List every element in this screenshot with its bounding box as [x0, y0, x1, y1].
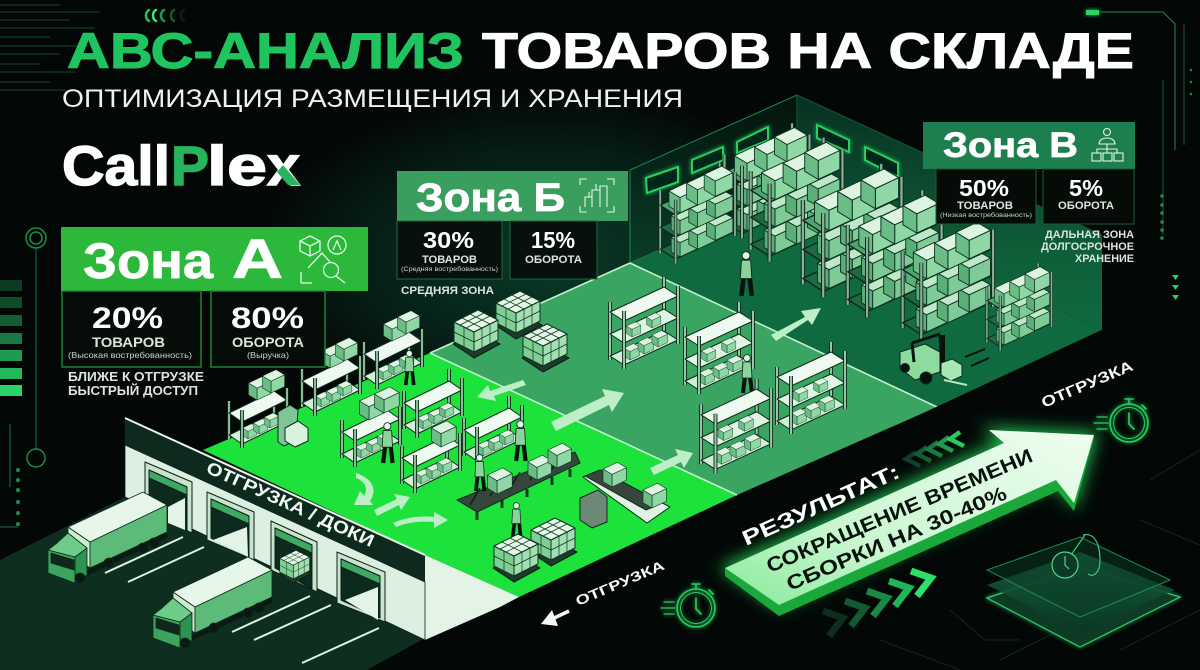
header text: Зона В: [943, 126, 1078, 165]
label: shipping left: [541, 558, 667, 626]
warehouse: building shell and floor: [0, 95, 1102, 670]
icon: zone B chart: [580, 179, 614, 212]
sign: docks: ОТГРУЗКА / ДОКИ: [203, 457, 377, 551]
panel: zone A: [61, 227, 368, 398]
logo: CallPlex: [62, 134, 300, 197]
header: [923, 122, 1135, 169]
floor: front strip: [425, 555, 519, 640]
ground: docks apron: [0, 497, 425, 670]
result line 1: СОКРАЩЕНИЕ ВРЕМЕНИ: [763, 445, 1036, 578]
chevrons: lower: [823, 571, 931, 636]
truck 2: [153, 557, 272, 648]
icon: top scan marks: [146, 10, 184, 21]
cell: 30% goods: 30%: [423, 227, 474, 253]
title: accent: АВС-АНАЛИЗ: [67, 23, 464, 79]
arrow edge: [725, 437, 1094, 616]
cell: 5% turnover: ОБОРОТА: [1058, 200, 1114, 212]
arrow body: [725, 430, 1094, 605]
cell: 80% turnover: 80%: [231, 302, 304, 335]
conveyor 2 with scanner: [580, 462, 670, 528]
note: ДАЛЬНАЯ ЗОНА: [1045, 229, 1134, 241]
racks: zone A: [229, 311, 526, 493]
logo: CallPlex: Call: [62, 134, 170, 197]
panel: zone B: [397, 171, 628, 297]
cell: 80% turnover: [211, 291, 325, 367]
note: ХРАНЕНИЕ: [1075, 253, 1134, 265]
cell: 30% goods: ТОВАРОВ: [422, 254, 477, 266]
forklift: [900, 334, 989, 385]
wall: back left: [630, 95, 797, 263]
arrow: to zone V: [771, 308, 821, 341]
arrow glow: [725, 430, 1094, 605]
worker at conveyor: [475, 455, 484, 491]
machine: picking terminal: [278, 405, 308, 447]
wall: back right: [797, 95, 1102, 330]
cell: 50% goods: ТОВАРОВ: [957, 200, 1013, 212]
windows: glowing: [646, 125, 898, 193]
note: ДОЛГОСРОЧНОЕ: [1041, 241, 1134, 253]
cell: 50% goods: (Низкая востребованность): [940, 211, 1032, 219]
floor: zone B: [430, 263, 937, 495]
dock door 3: [271, 521, 317, 592]
icon: zone V hierarchy: [1092, 128, 1123, 161]
header text: Зона Б: [416, 176, 565, 220]
cell: 5% turnover: 5%: [1069, 175, 1103, 201]
cell: 20% goods: 20%: [92, 302, 163, 335]
logo: CallPlex: le: [207, 134, 267, 197]
panel: zone V: [923, 122, 1135, 265]
cell: 80% turnover: ОБОРОТА: [232, 334, 304, 350]
truck 1: [48, 492, 167, 583]
logo: CallPlex: x: [267, 134, 300, 197]
dock door 4: [337, 552, 385, 622]
note: [68, 369, 204, 398]
sign band: [125, 418, 425, 582]
cell: 15% turnover: 15%: [531, 227, 575, 253]
note: БЛИЖЕ К ОТГРУЗКЕ: [68, 369, 204, 384]
icon: zone A analysis: [300, 236, 346, 283]
note: [1041, 229, 1134, 265]
cell: 5% turnover: [1043, 169, 1134, 224]
cell: 50% goods: [936, 169, 1036, 224]
logo: CallPlex: P: [171, 134, 209, 197]
title: [67, 23, 1134, 79]
cell: 30% goods: [397, 221, 502, 279]
cell: 80% turnover: (Выручка): [247, 350, 289, 360]
racks: zone V: [660, 123, 1052, 351]
floor: zone V: [630, 190, 1102, 407]
subtitle: ОПТИМИЗАЦИЯ РАЗМЕЩЕНИЯ И ХРАНЕНИЯ: [62, 85, 683, 113]
pallets: zone B: [453, 291, 569, 372]
dock door 1: [145, 462, 192, 533]
cell: 15% turnover: [510, 221, 597, 279]
parking lines: [105, 537, 379, 663]
chip: isometric clock platform: [880, 450, 1200, 670]
icon: stopwatch left: [661, 584, 715, 627]
header letter: А: [232, 227, 283, 290]
conveyor 1: [457, 443, 580, 520]
label: shipping left: ОТГРУЗКА: [573, 558, 667, 609]
dock door 2: [207, 492, 254, 560]
floor arrows: [354, 380, 693, 528]
result label: РЕЗУЛЬТАТ:: [739, 460, 903, 551]
icon: stopwatch right: [1094, 399, 1148, 442]
decoration: left panel: [0, 5, 130, 527]
title: main: ТОВАРОВ НА СКЛАДЕ: [482, 23, 1134, 79]
cell: 50% goods: 50%: [959, 175, 1009, 201]
cell: 15% turnover: ОБОРОТА: [525, 254, 582, 266]
floor: zone A: [203, 353, 737, 597]
cell: 20% goods: (Высокая востребованность): [68, 350, 192, 360]
chevrons: upper: [906, 432, 964, 466]
cell: 30% goods: (Средняя востребованность): [401, 265, 498, 273]
dock wall: [125, 418, 425, 640]
header: [397, 171, 628, 221]
note: БЫСТРЫЙ ДОСТУП: [68, 383, 198, 398]
result line 2: СБОРКИ НА 30-40%: [783, 483, 1010, 596]
cell: 20% goods: ТОВАРОВ: [92, 334, 165, 350]
header text: Зона: [83, 233, 214, 289]
note: СРЕДНЯЯ ЗОНА: [401, 285, 494, 297]
wall body: [125, 445, 425, 640]
racks: zone B: [610, 277, 845, 474]
pallets and worker: zone A: [493, 503, 577, 582]
result arrow: [725, 430, 1094, 616]
label: shipping right: ОТГРУЗКА: [1039, 358, 1136, 412]
decoration: right panel: [1086, 10, 1191, 300]
header: [61, 227, 368, 291]
cell: 20% goods: [62, 291, 201, 367]
